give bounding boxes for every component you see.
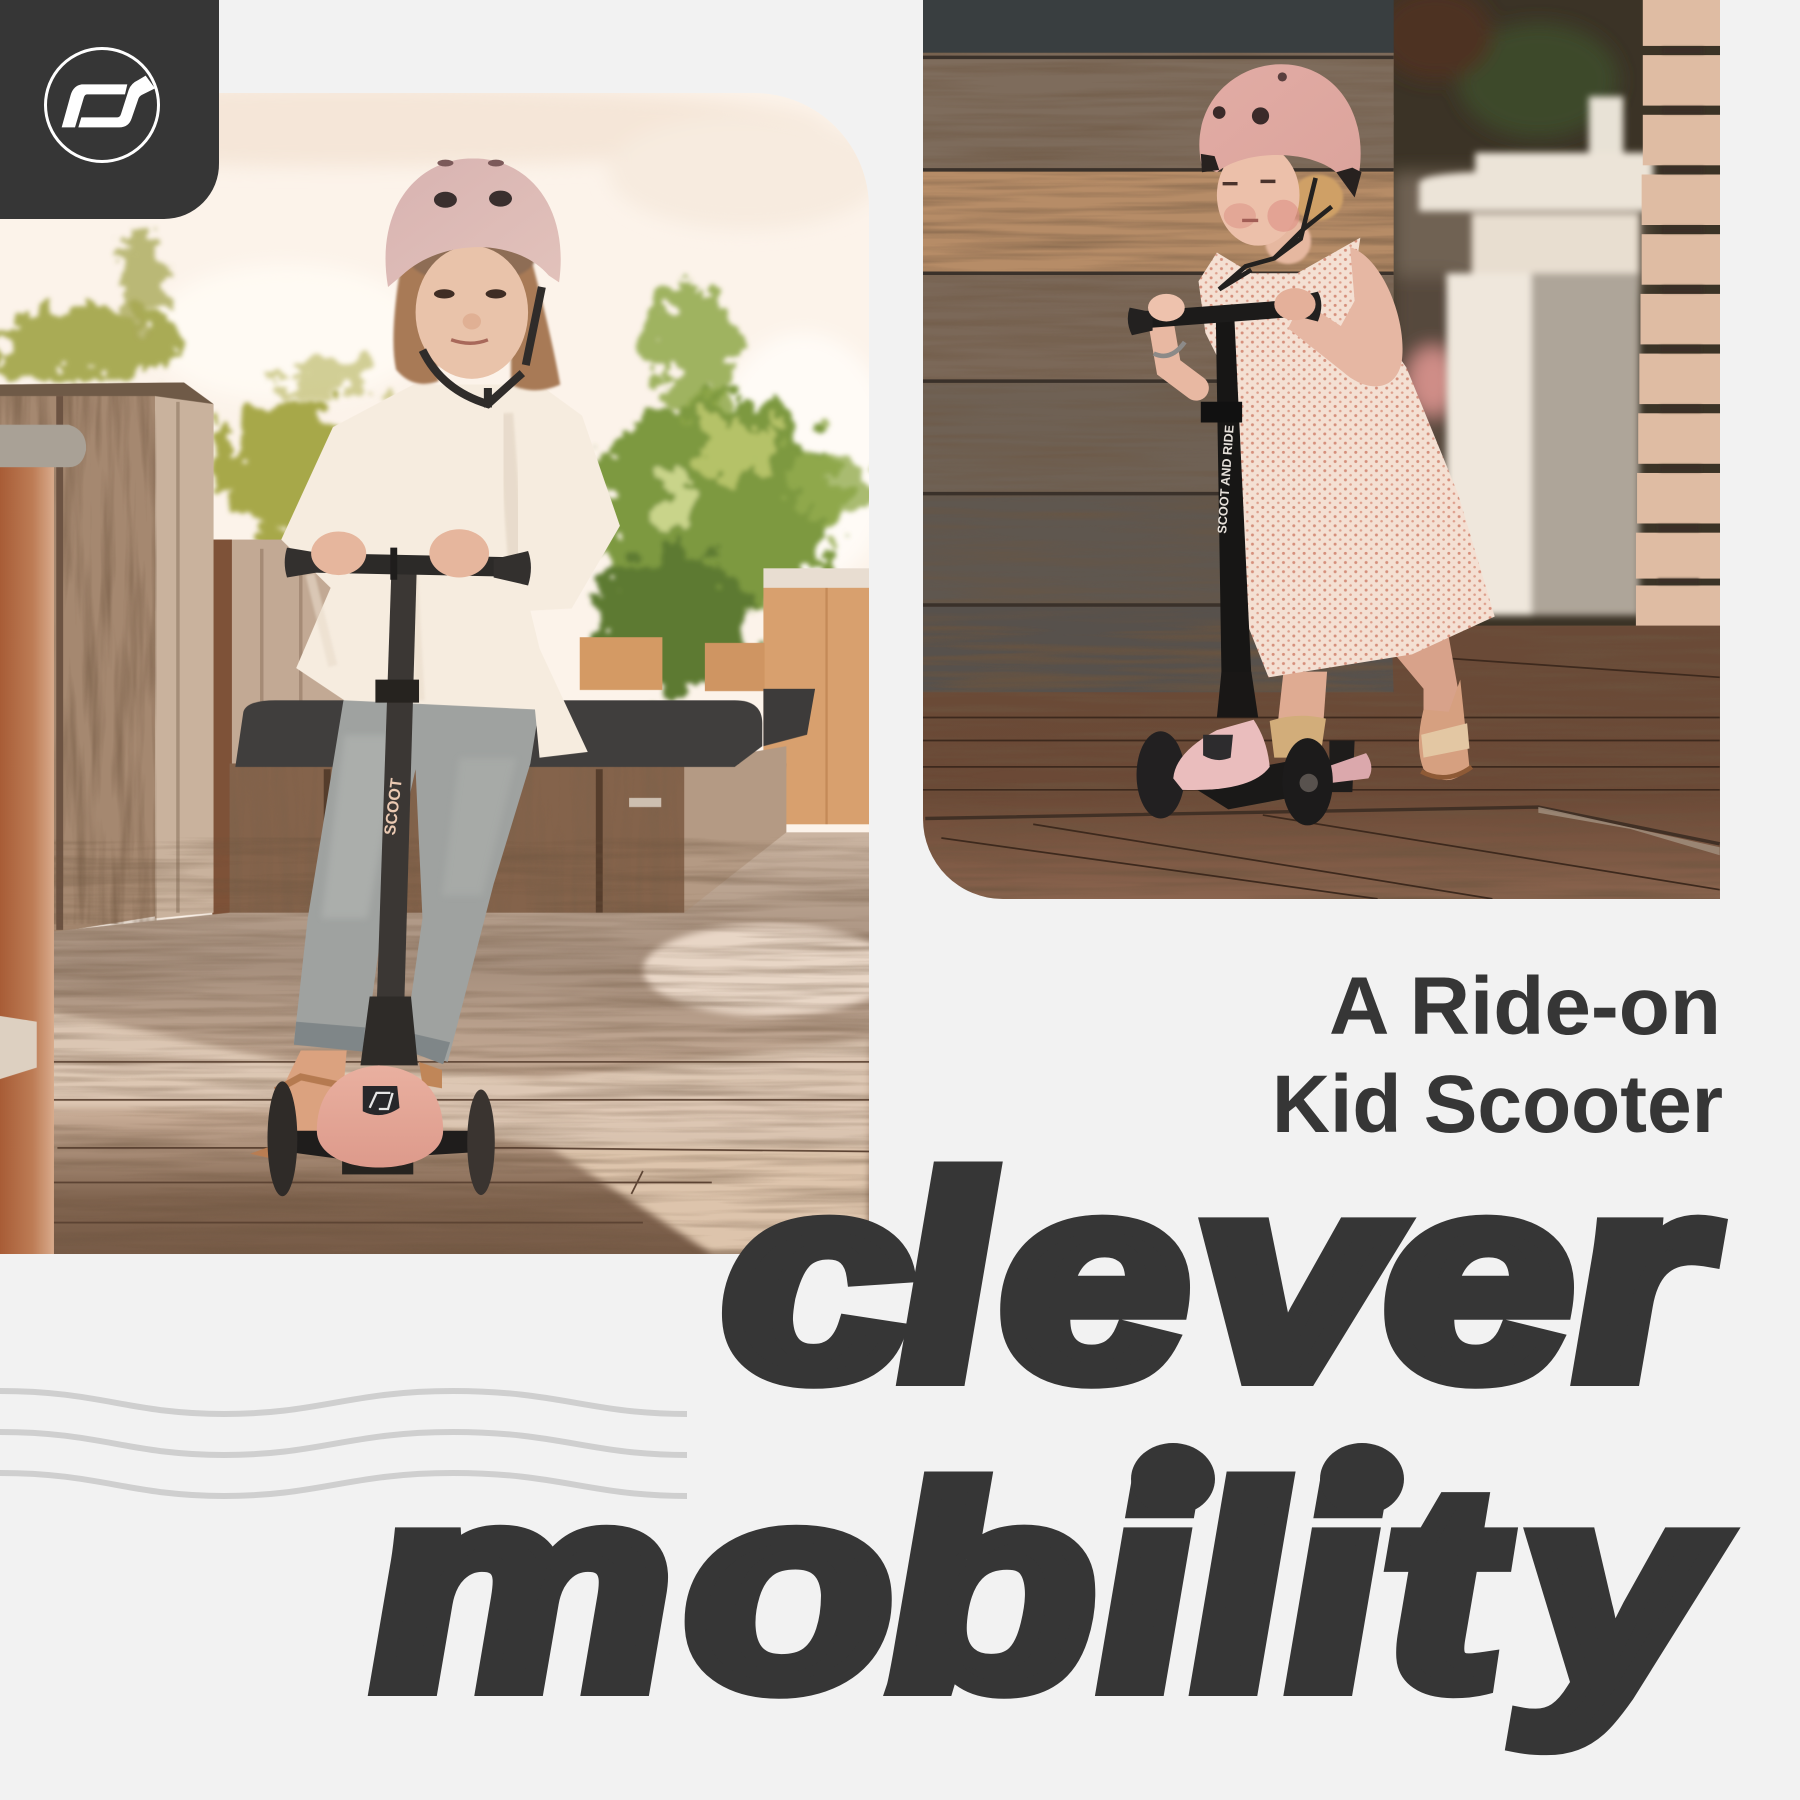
foreground table post [0,425,86,1266]
girl left: hair [393,233,560,390]
sky backdrop [0,93,869,926]
girl left: jeans [294,695,540,1064]
girl left: chin strap [422,287,542,408]
scooter right: wheels and deck [1137,720,1371,825]
fence [212,540,350,918]
scooter left: stem [360,568,419,1065]
brick column [1636,0,1721,634]
toddler: arms [1154,247,1403,388]
scooter left: base, wheels and deck [267,1065,495,1196]
scooter right: handlebar and hands [1128,288,1321,335]
girl left: feet and sandals [250,1050,442,1159]
blurred backdrop [1378,0,1722,712]
photo: girl in white blouse on scooter [0,80,895,1266]
scooter right: stem [1201,312,1258,718]
stem lettering: SCOOT AND RIDE [1215,424,1237,534]
big planter, left [0,382,214,932]
toddler: dress [1199,238,1495,677]
toddler: face [1217,145,1300,246]
headline: clever [710,1119,1730,1438]
wavy lines [0,1391,687,1496]
toddler: chin strap [1219,178,1332,289]
foliage [0,230,866,687]
headline: i dots [1131,1443,1404,1515]
logo badge [0,0,219,219]
girl left: blouse [281,385,620,758]
wooden boxes, right [580,568,869,824]
subtitle [1272,961,1723,1150]
photo: toddler in floral dress on scooter [923,0,1727,907]
toddler: helmet [1199,64,1362,197]
stem lettering: SCOOT [381,777,406,836]
toddler: legs and sandals [1270,637,1472,780]
headline [358,1119,1740,1749]
headline: mobility [358,1429,1740,1749]
icon: brand mark [46,48,158,162]
subtitle: A Ride-on [1329,961,1721,1052]
wooden wall [923,0,1394,697]
subtitle: Kid Scooter [1272,1059,1723,1150]
toddler: hair and neck [1265,174,1343,264]
deck floor [46,832,895,1263]
scooter left: handlebar and hands [285,529,531,585]
girl left: face [416,246,528,379]
floor [923,626,1727,907]
bench [230,689,815,918]
white table and column [1419,96,1653,615]
girl left: helmet [386,158,561,287]
